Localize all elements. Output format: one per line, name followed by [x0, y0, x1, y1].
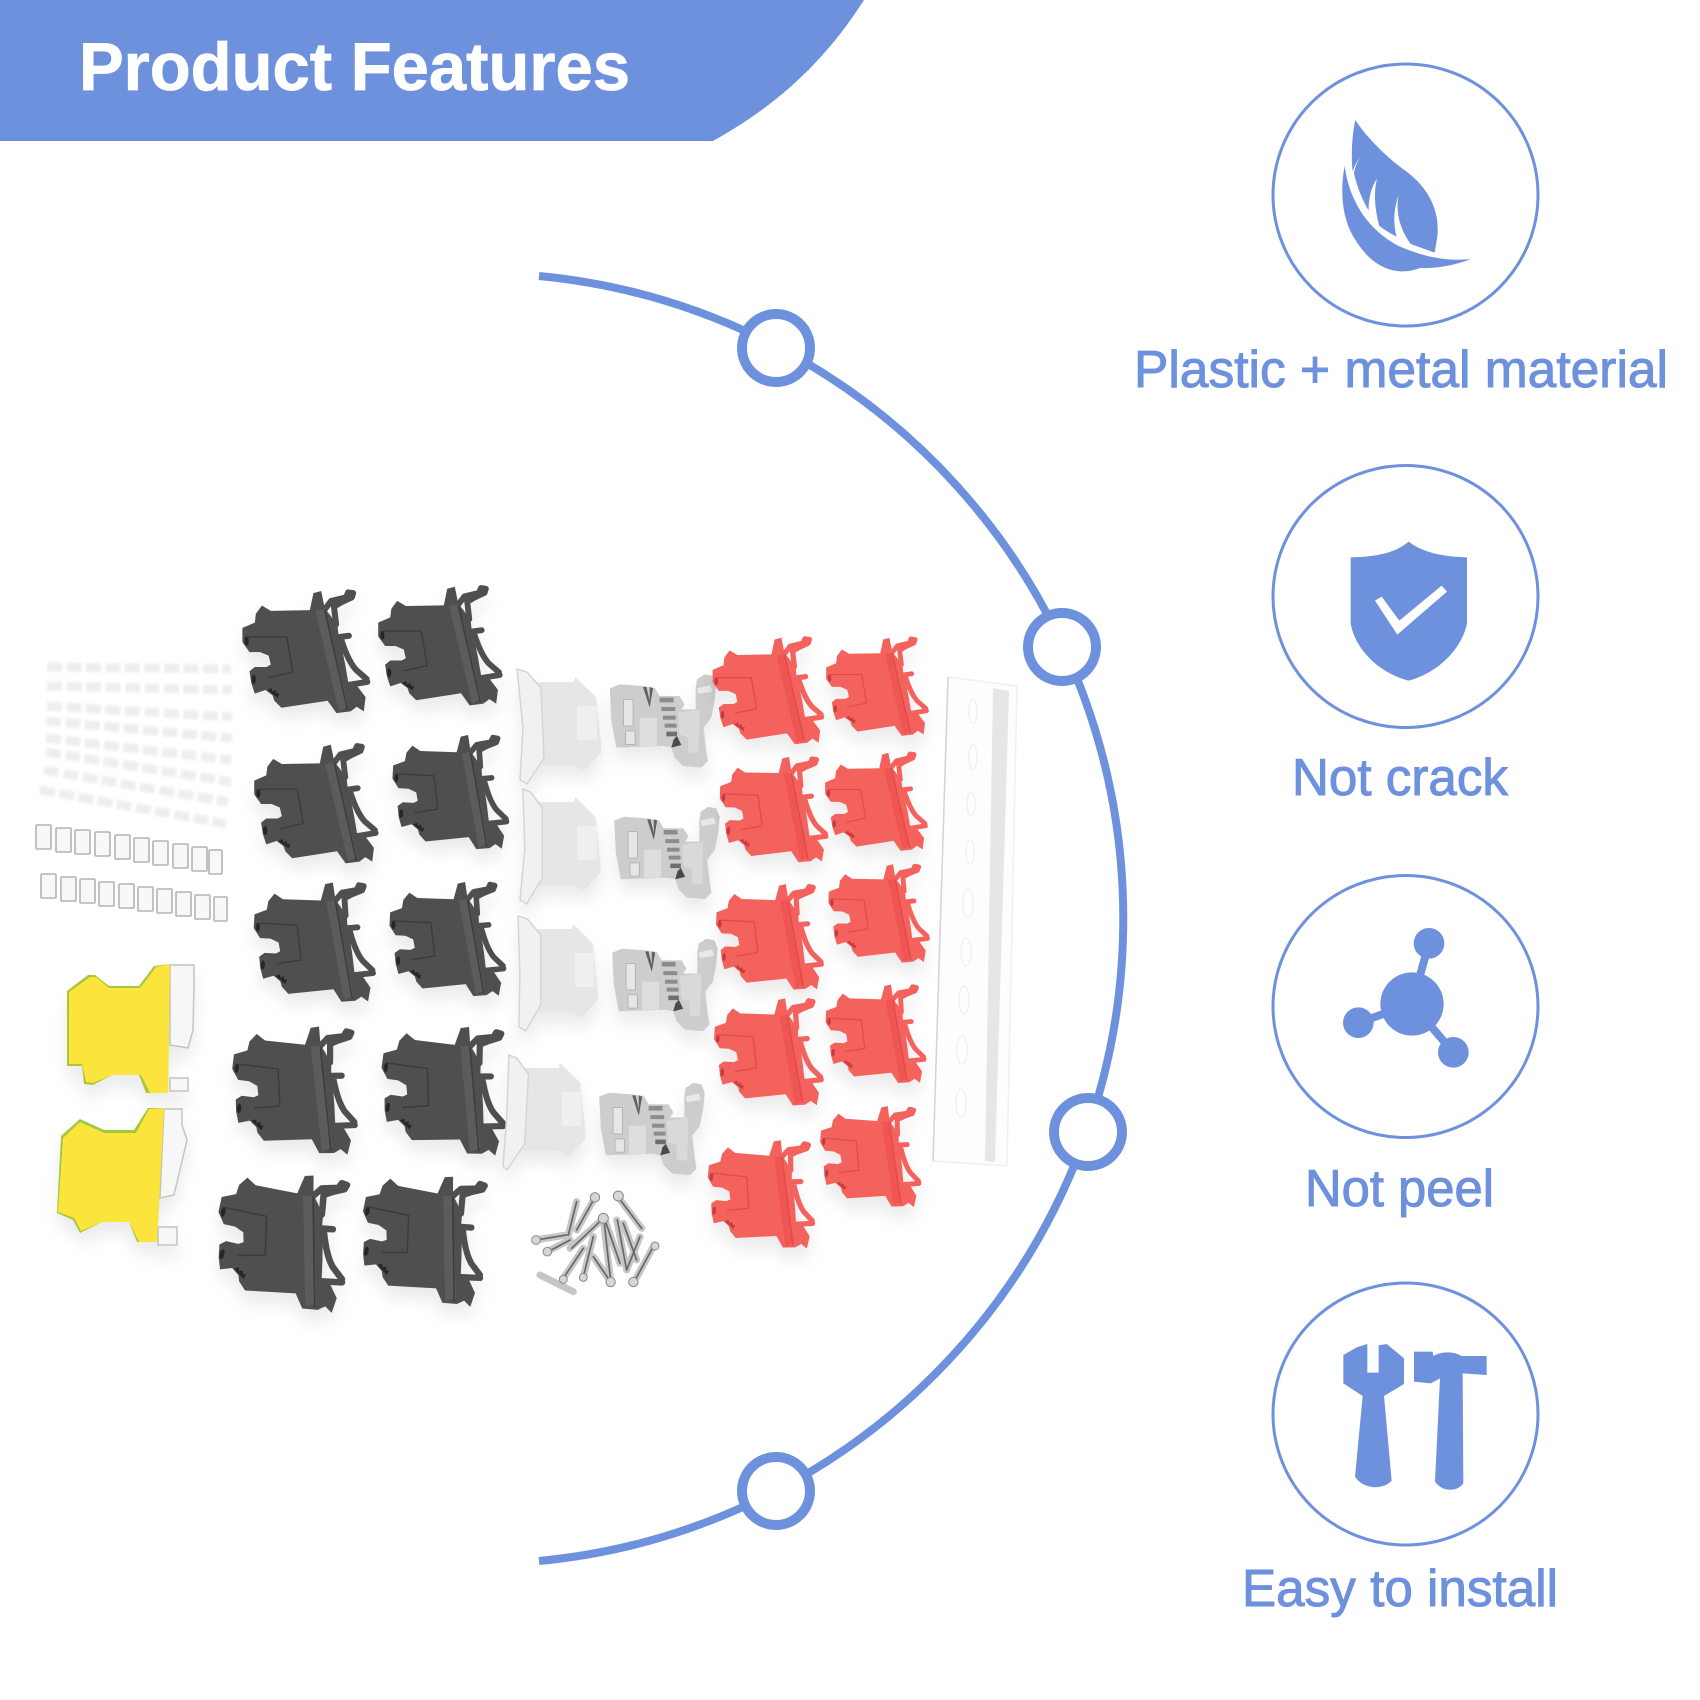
feature: not peel: [1273, 876, 1538, 1218]
red block 6: [826, 638, 926, 736]
product photo: kit parts: [36, 587, 1017, 1316]
red block 1: [713, 638, 822, 744]
red block 9: [823, 981, 928, 1084]
node 3: [1054, 1098, 1122, 1166]
black block 2: [254, 745, 376, 863]
screws: [532, 1191, 659, 1292]
feature: not crack: [1273, 466, 1538, 807]
black block 9: [371, 1016, 516, 1158]
red block 4: [711, 995, 825, 1107]
icon: leaf: [1342, 120, 1471, 271]
bracket 4: [599, 1083, 705, 1175]
cover 4: [503, 1055, 585, 1170]
red block 5: [701, 1133, 821, 1250]
label: Easy to install: [1242, 1560, 1558, 1618]
cover 2: [520, 789, 600, 904]
icon: shield with check: [1351, 542, 1467, 681]
icon: molecule: [1343, 928, 1469, 1068]
node 4: [742, 1457, 810, 1525]
red block 2: [718, 755, 829, 863]
black block 5: [202, 1158, 363, 1316]
black block 6: [378, 587, 500, 705]
feature: plastic + metal material: [1134, 64, 1668, 399]
metal jumper bridges: [36, 825, 227, 921]
arc: [539, 276, 1123, 1561]
red block 8: [826, 862, 930, 964]
arc timeline with nodes: [539, 276, 1123, 1561]
feature: easy to install: [1242, 1283, 1558, 1618]
light grey end covers: [503, 669, 601, 1170]
cover 3: [518, 916, 598, 1031]
black terminal blocks: [202, 587, 516, 1316]
node 1: [742, 314, 810, 382]
bracket 2: [614, 807, 720, 899]
badge ring: [1273, 466, 1538, 728]
yellow block 2: [57, 1108, 187, 1245]
banner shape: [0, 0, 864, 141]
badge ring: [1273, 876, 1538, 1138]
bracket 1: [610, 674, 716, 768]
transparent marker strips: [40, 667, 232, 824]
black block 8: [386, 878, 508, 998]
black block 1: [242, 591, 367, 713]
red block 3: [713, 881, 825, 991]
label: Not peel: [1305, 1160, 1494, 1218]
badge ring: [1273, 64, 1538, 326]
red block 10: [815, 1101, 925, 1209]
icon: wrench and hammer: [1343, 1344, 1487, 1490]
black block 7: [389, 731, 511, 851]
black block 10: [348, 1160, 500, 1309]
red terminal blocks: [701, 638, 930, 1250]
black block 4: [223, 1017, 366, 1157]
din rail: [933, 677, 1017, 1166]
badge ring: [1273, 1283, 1538, 1545]
black block 3: [250, 878, 378, 1003]
yellow block 1: [67, 964, 194, 1093]
red block 7: [825, 753, 925, 851]
node 2: [1028, 613, 1096, 681]
banner: product features: [0, 0, 864, 141]
grey end brackets: [599, 674, 720, 1175]
cover 1: [517, 669, 601, 784]
label: Plastic + metal material: [1134, 341, 1668, 399]
label: Not crack: [1292, 749, 1509, 807]
title: Product Features: [79, 29, 630, 105]
bracket 3: [612, 939, 718, 1031]
